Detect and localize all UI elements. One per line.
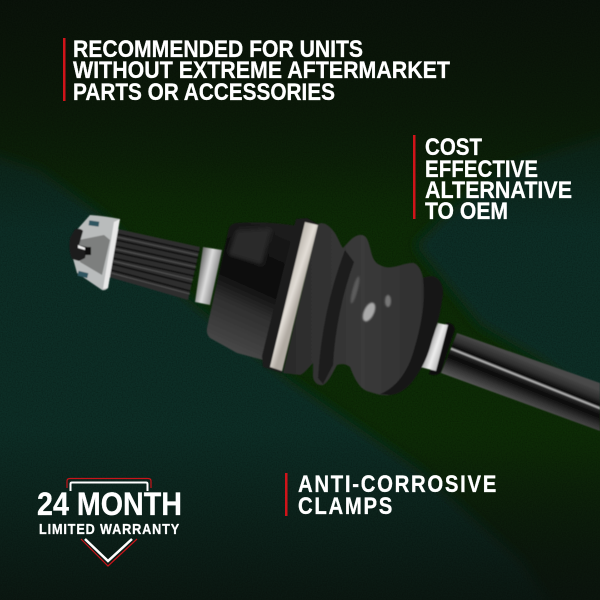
shaft [441,333,600,431]
outer cup [207,222,300,360]
callout: cost effective: COST [425,134,482,161]
callout: anti-corrosive clamps [285,471,498,520]
axle shaft product photo [69,215,600,431]
collar [195,247,222,305]
spline [109,229,200,300]
badge chevron [81,539,137,566]
callout: recommended use [63,36,450,106]
shaft clamp ring [420,323,455,375]
callout: cost effective: TO OEM [425,198,508,225]
callout: anti-corrosive clamps: ANTI-CORROSIVE [298,471,498,498]
flange and silver band [262,218,318,373]
badge top frame [67,478,151,491]
callout: cost effective: ALTERNATIVE [425,177,572,204]
callout: anti-corrosive clamps: CLAMPS [298,493,394,520]
callout: recommended use: RECOMMENDED FOR UNITS [73,36,363,63]
callout: recommended use: WITHOUT EXTREME AFTERMARKET [73,57,450,84]
warranty badge [37,478,182,566]
warranty badge: LIMITED WARRANTY [39,521,180,538]
boot [283,223,443,395]
callout: cost effective: EFFECTIVE [425,156,538,183]
callout: cost effective [413,134,572,225]
castle nut [69,215,120,290]
callout: recommended use: PARTS OR ACCESSORIES [73,79,335,106]
warranty badge: 24 MONTH [37,486,182,522]
